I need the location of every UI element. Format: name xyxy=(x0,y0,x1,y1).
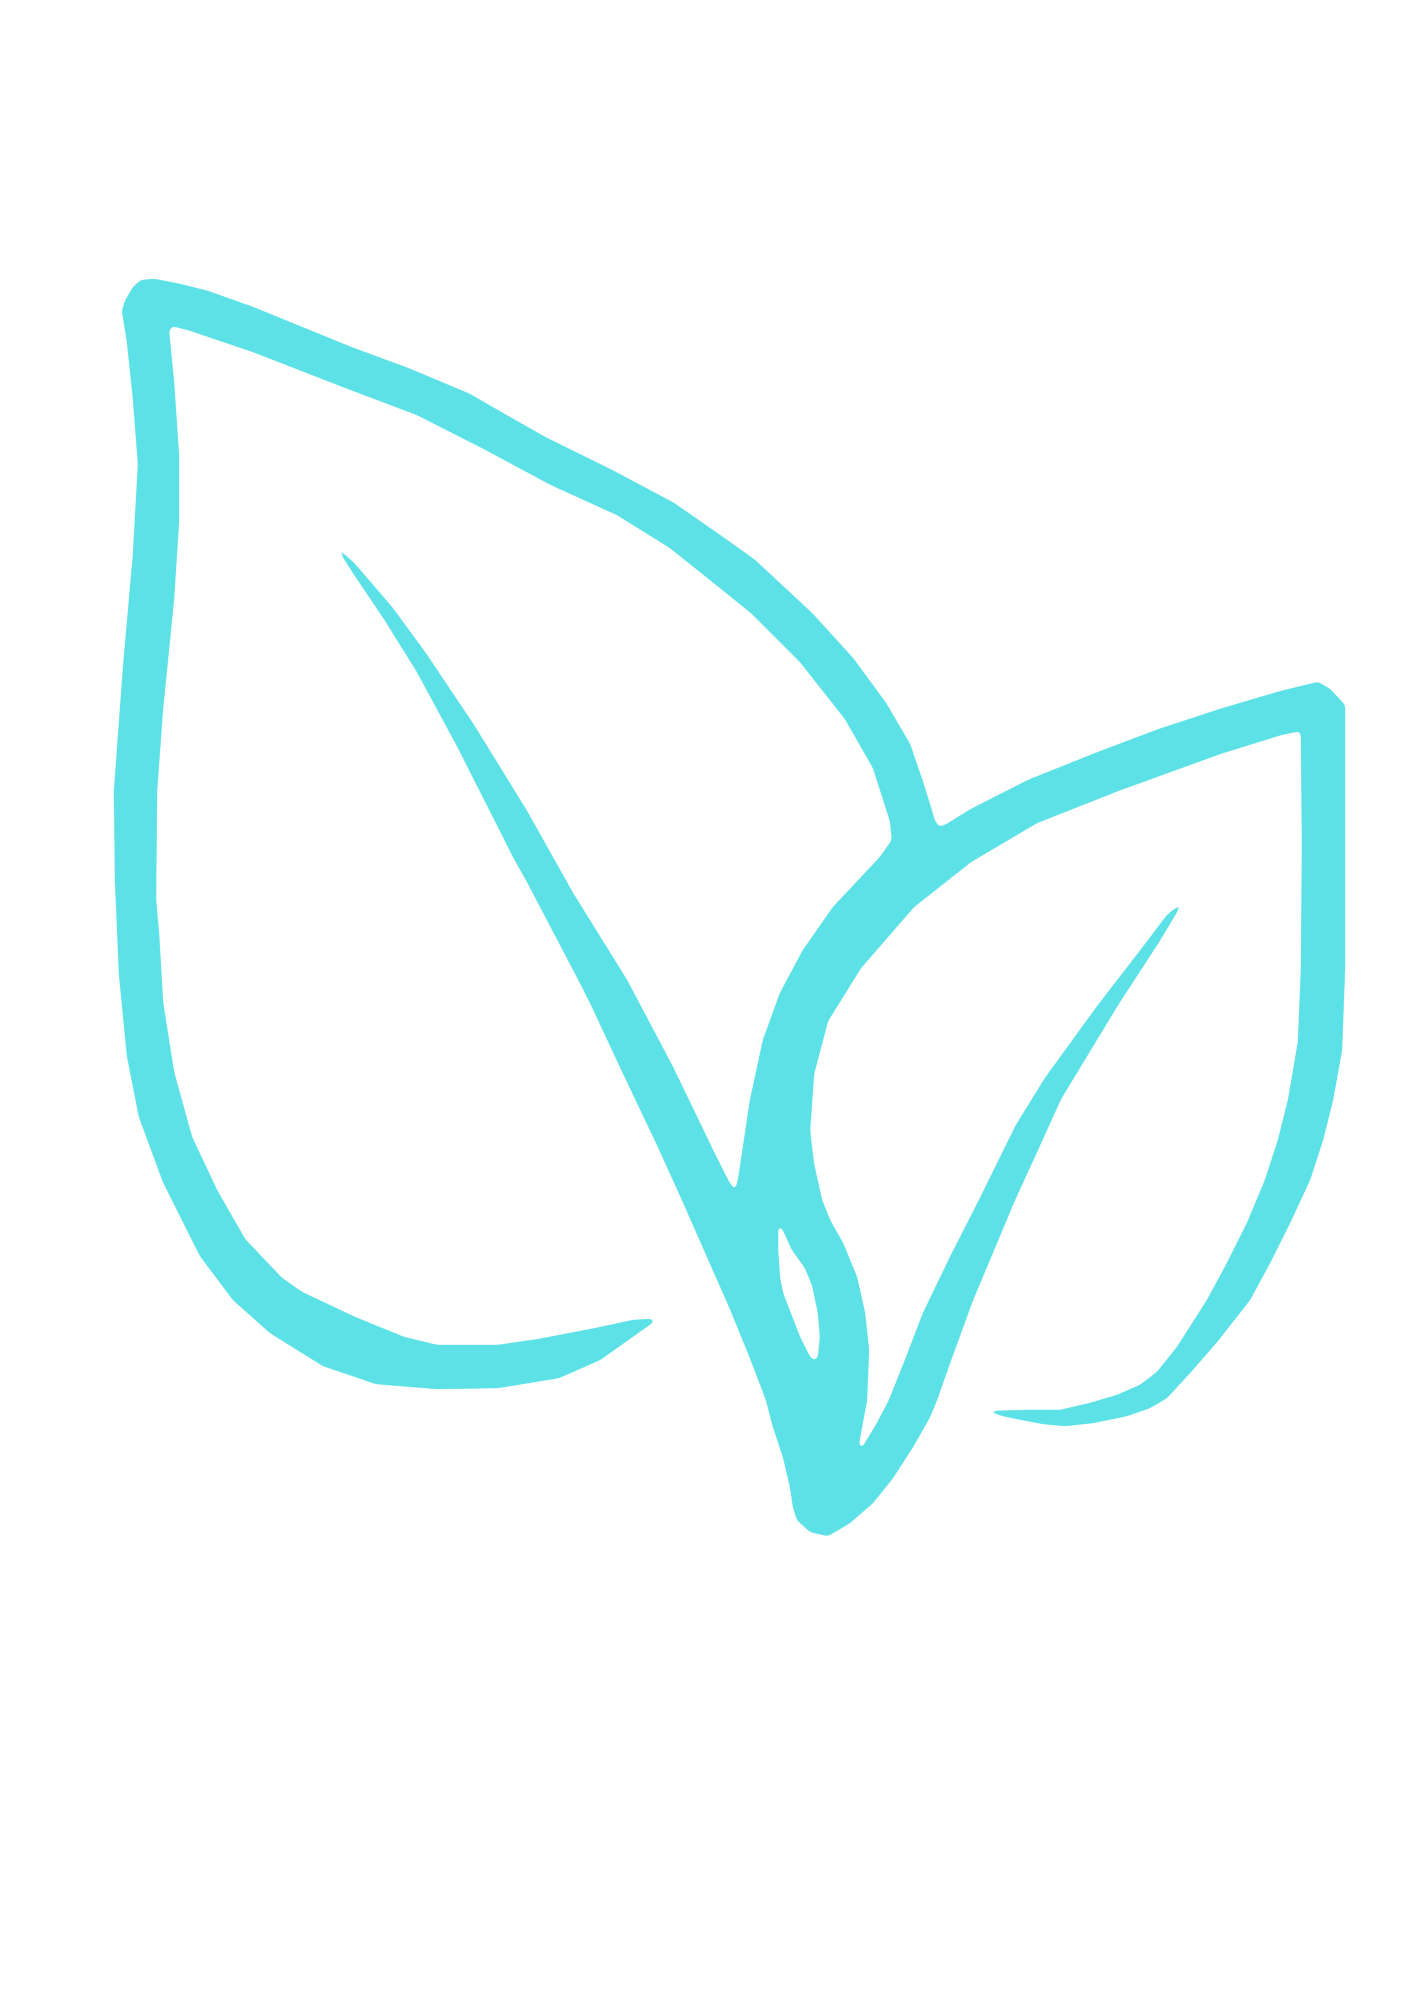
icon: twin leaves outline xyxy=(114,279,1345,1536)
